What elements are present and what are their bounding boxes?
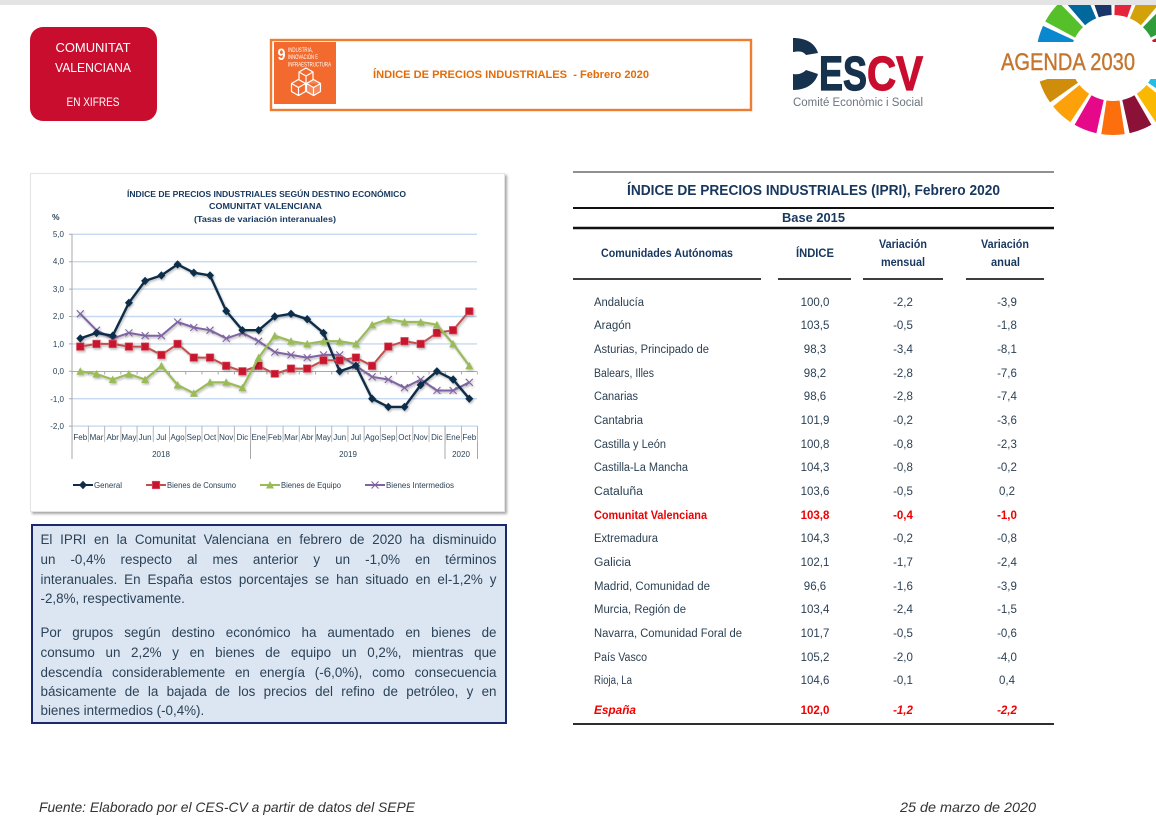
table rows: -0,8 [997, 533, 1017, 545]
x axis month labels: Ene [446, 433, 461, 442]
badge: Comunitat Valenciana en xifres: VALENCIANA [55, 61, 132, 75]
table rows: 104,6 [801, 675, 829, 687]
y axis labels: 1,0 [53, 340, 65, 349]
x axis year labels: 2018 [152, 450, 170, 459]
table rows: -1,6 [893, 581, 913, 593]
x axis month labels: Mar [90, 433, 104, 442]
table title: ÍNDICE DE PRECIOS INDUSTRIALES (IPRI), Febrero 2020 [627, 182, 1000, 199]
table rows: 100,8 [801, 439, 829, 451]
table rows: Galicia [594, 557, 632, 569]
y axis labels: 4,0 [53, 257, 65, 266]
table rows: Aragón [594, 320, 631, 332]
chart legend: General [94, 481, 122, 490]
table rows: -4,0 [997, 652, 1017, 664]
table rows: Murcia, Región de [594, 604, 686, 616]
series: Bienes de Equipo [80, 319, 469, 393]
table rows: -0,5 [893, 486, 913, 498]
table rows: 100,0 [801, 297, 829, 309]
table rows: -2,4 [893, 604, 914, 616]
table rows: -1,5 [997, 604, 1017, 616]
chart title: (Tasas de variación interanuales) [194, 215, 336, 224]
x axis month labels: Dic [237, 433, 248, 442]
x axis year labels [152, 450, 470, 459]
chart legend: Bienes de Equipo [281, 481, 342, 490]
table rows: -3,6 [997, 415, 1017, 427]
logo: Agenda 2030 wheel [1001, 0, 1156, 143]
table rows: 101,7 [801, 628, 829, 640]
x axis month labels: Abr [106, 433, 119, 442]
table rows: Cantabria [594, 415, 644, 427]
y axis labels: 3,0 [53, 285, 65, 294]
table rows: Madrid, Comunidad de [594, 581, 710, 593]
table column headers: Comunidades Autónomas [601, 246, 733, 260]
table rows: -0,2 [893, 415, 913, 427]
text panel: commentary: un -0,4% respecto al mes anterior y un -1,0% en términos [40, 552, 496, 567]
table rows: Extremadura [594, 533, 659, 545]
x axis month labels: Ago [365, 433, 380, 442]
x axis month labels: May [316, 433, 331, 442]
x axis month labels: May [121, 433, 136, 442]
table column headers [601, 237, 1029, 269]
icon: SDG 9 industry, innovation and infrastructure: INDUSTRIA, [288, 48, 313, 54]
x axis year labels: 2019 [339, 450, 357, 459]
table column headers: anual [991, 255, 1020, 269]
y axis labels: 0,0 [53, 367, 65, 376]
x axis month labels: Dic [431, 433, 443, 442]
table rows: 103,5 [801, 320, 829, 332]
x axis month labels: Feb [268, 433, 282, 442]
table rows: -7,6 [997, 368, 1017, 380]
chart legend [73, 481, 454, 490]
x axis month labels [73, 433, 477, 442]
logo: CESCV: CV [867, 48, 923, 101]
table rows: -0,2 [893, 533, 913, 545]
table rows: España [594, 705, 637, 717]
table rows: -2,4 [997, 557, 1018, 569]
table rows: Navarra, Comunidad Foral de [594, 628, 742, 640]
table rows: -0,5 [893, 628, 913, 640]
table rows: -8,1 [997, 344, 1017, 356]
table rows: -2,3 [997, 439, 1017, 451]
table rows: Asturias, Principado de [594, 344, 709, 356]
table rows: 104,3 [801, 533, 829, 545]
table column headers: Variación [981, 237, 1029, 251]
table rows: 103,6 [801, 486, 829, 498]
text panel: commentary: básicamente de la bajada de los precios del refino de petróleo, y en [40, 684, 496, 699]
header title text: ÍNDICE DE PRECIOS INDUSTRIALES - Febrero 2020 [373, 68, 649, 81]
table rows: 102,0 [801, 705, 829, 717]
table rows: Comunitat Valenciana [594, 510, 708, 522]
table rows: -7,4 [997, 391, 1018, 403]
top grey bar [0, 0, 1156, 5]
table rows: Rioja, La [594, 675, 633, 687]
x axis month labels: Feb [462, 433, 477, 442]
table base year: Base 2015 [782, 210, 845, 225]
y axis labels: 5,0 [53, 230, 65, 239]
y axis labels: 2,0 [53, 312, 65, 321]
table rows [594, 297, 1018, 717]
icon: SDG 9 industry, innovation and infrastructure [274, 42, 336, 104]
table rows: 104,3 [801, 462, 829, 474]
table rows: -2,2 [893, 297, 913, 309]
badge: Comunitat Valenciana en xifres [30, 27, 157, 121]
table rows: 98,3 [804, 344, 826, 356]
x axis month labels: Jul [156, 433, 167, 442]
text panel: commentary: descendía considerablemente en energía (-6,0%), como consecuencia [40, 665, 496, 680]
table rows: 0,2 [999, 486, 1015, 498]
logo: CESCV [793, 38, 923, 109]
table rows: -0,8 [893, 462, 913, 474]
table rows: -0,1 [893, 675, 913, 687]
chart legend: Bienes de Consumo [167, 481, 237, 490]
x axis year labels: 2020 [452, 450, 470, 459]
table rows: Castilla y León [594, 439, 666, 451]
x axis month labels: Nov [219, 433, 233, 442]
x axis month labels: Jul [351, 433, 361, 442]
table rows: -2,0 [893, 652, 913, 664]
panel: line chart [30, 174, 504, 512]
footer date: 25 de marzo de 2020 [899, 799, 1036, 815]
table rows: 0,4 [999, 675, 1016, 687]
chart title: ÍNDICE DE PRECIOS INDUSTRIALES SEGÚN DESTINO ECONÓMICO [127, 190, 406, 199]
x axis month labels: Jun [333, 433, 346, 442]
table rows: -2,8 [893, 368, 913, 380]
x axis month labels: Feb [73, 433, 88, 442]
x axis month labels: Abr [301, 433, 314, 442]
x axis month labels: Mar [284, 433, 298, 442]
y axis labels: -1,0 [50, 395, 65, 404]
text panel: commentary: interanuales. En España estos porcentajes se han situado en el-1,2% y [40, 572, 496, 587]
text panel: commentary: El IPRI en la Comunitat Valenciana en febrero de 2020 ha disminuido [40, 532, 496, 547]
table rows: -3,9 [997, 297, 1017, 309]
icon: SDG 9 industry, innovation and infrastructure: INFRAESTRUCTURA [288, 62, 331, 68]
table rows: -0,6 [997, 628, 1017, 640]
table rows: 98,2 [804, 368, 826, 380]
table rows: 98,6 [804, 391, 826, 403]
logo: CESCV: Comité Econòmic i Social [793, 97, 923, 109]
header box: index title with SDG 9 icon [271, 40, 751, 110]
chart legend: Bienes Intermedios [386, 481, 454, 490]
series: Bienes de Consumo [80, 311, 469, 374]
table rows: -0,2 [997, 462, 1017, 474]
badge: Comunitat Valenciana en xifres: COMUNITAT [56, 41, 131, 55]
table: IPRI by autonomous community [573, 172, 1054, 724]
x axis month labels: Nov [414, 433, 428, 442]
table rows: -1,7 [893, 557, 913, 569]
badge: Comunitat Valenciana en xifres: EN XIFRES [66, 97, 120, 109]
y axis unit: % [52, 212, 60, 222]
table rows: -3,4 [893, 344, 914, 356]
table rows: 101,9 [801, 415, 829, 427]
text panel: commentary: consumo un 2,2% y en bienes de equipo un 0,2%, mientras que [40, 645, 496, 660]
x axis month labels: Ago [170, 433, 185, 442]
y axis labels [50, 230, 65, 431]
logo: CESCV: ES [819, 48, 867, 101]
table rows: -1,8 [997, 320, 1017, 332]
table column headers: ÍNDICE [796, 245, 834, 260]
chart title [127, 190, 406, 224]
table rows: 102,1 [801, 557, 829, 569]
table rows: -2,2 [997, 705, 1018, 717]
table rows: -2,8 [893, 391, 913, 403]
x axis month labels: Sep [381, 433, 396, 442]
x axis month labels: Ene [251, 433, 266, 442]
chart title: COMUNITAT VALENCIANA [209, 202, 322, 211]
series: General [80, 264, 469, 407]
text panel: commentary: Por grupos según destino económico ha aumentado en bienes de [40, 625, 496, 640]
table rows: -1,0 [997, 510, 1017, 522]
text panel: commentary: bienes intermedios (-0,4%). [40, 703, 204, 718]
table rows: Castilla-La Mancha [594, 462, 689, 474]
table column headers: Variación [879, 237, 927, 251]
table rows: Cataluña [594, 486, 644, 498]
table rows: Andalucía [594, 297, 645, 309]
table rows: -1,2 [893, 705, 914, 717]
text panel: commentary: -2,8%, respectivamente. [40, 591, 185, 606]
table rows: 103,8 [801, 510, 830, 522]
footer source: Fuente: Elaborado por el CES-CV a partir de datos del SEPE [39, 799, 416, 815]
table rows: 103,4 [801, 604, 830, 616]
text panel: commentary [31, 524, 507, 724]
table rows: 96,6 [804, 581, 826, 593]
table rows: -0,4 [893, 510, 914, 522]
icon: SDG 9 industry, innovation and infrastructure: 9 [278, 45, 286, 64]
table rows: -0,8 [893, 439, 913, 451]
x axis month labels: Oct [204, 433, 217, 442]
table rows: -3,9 [997, 581, 1017, 593]
series: Bienes Intermedios [80, 314, 469, 390]
x axis month labels: Sep [187, 433, 201, 442]
table column headers: mensual [881, 255, 925, 269]
icon: SDG 9 industry, innovation and infrastructure: INNOVACIÓN E [288, 54, 318, 61]
table rows: Balears, Illes [594, 368, 654, 380]
table rows: Canarias [594, 391, 638, 403]
table rows: 105,2 [801, 652, 829, 664]
table rows: -0,5 [893, 320, 913, 332]
y axis labels: -2,0 [50, 422, 65, 431]
x axis month labels: Oct [398, 433, 411, 442]
table rows: País Vasco [594, 652, 647, 664]
x axis month labels: Jun [139, 433, 152, 442]
